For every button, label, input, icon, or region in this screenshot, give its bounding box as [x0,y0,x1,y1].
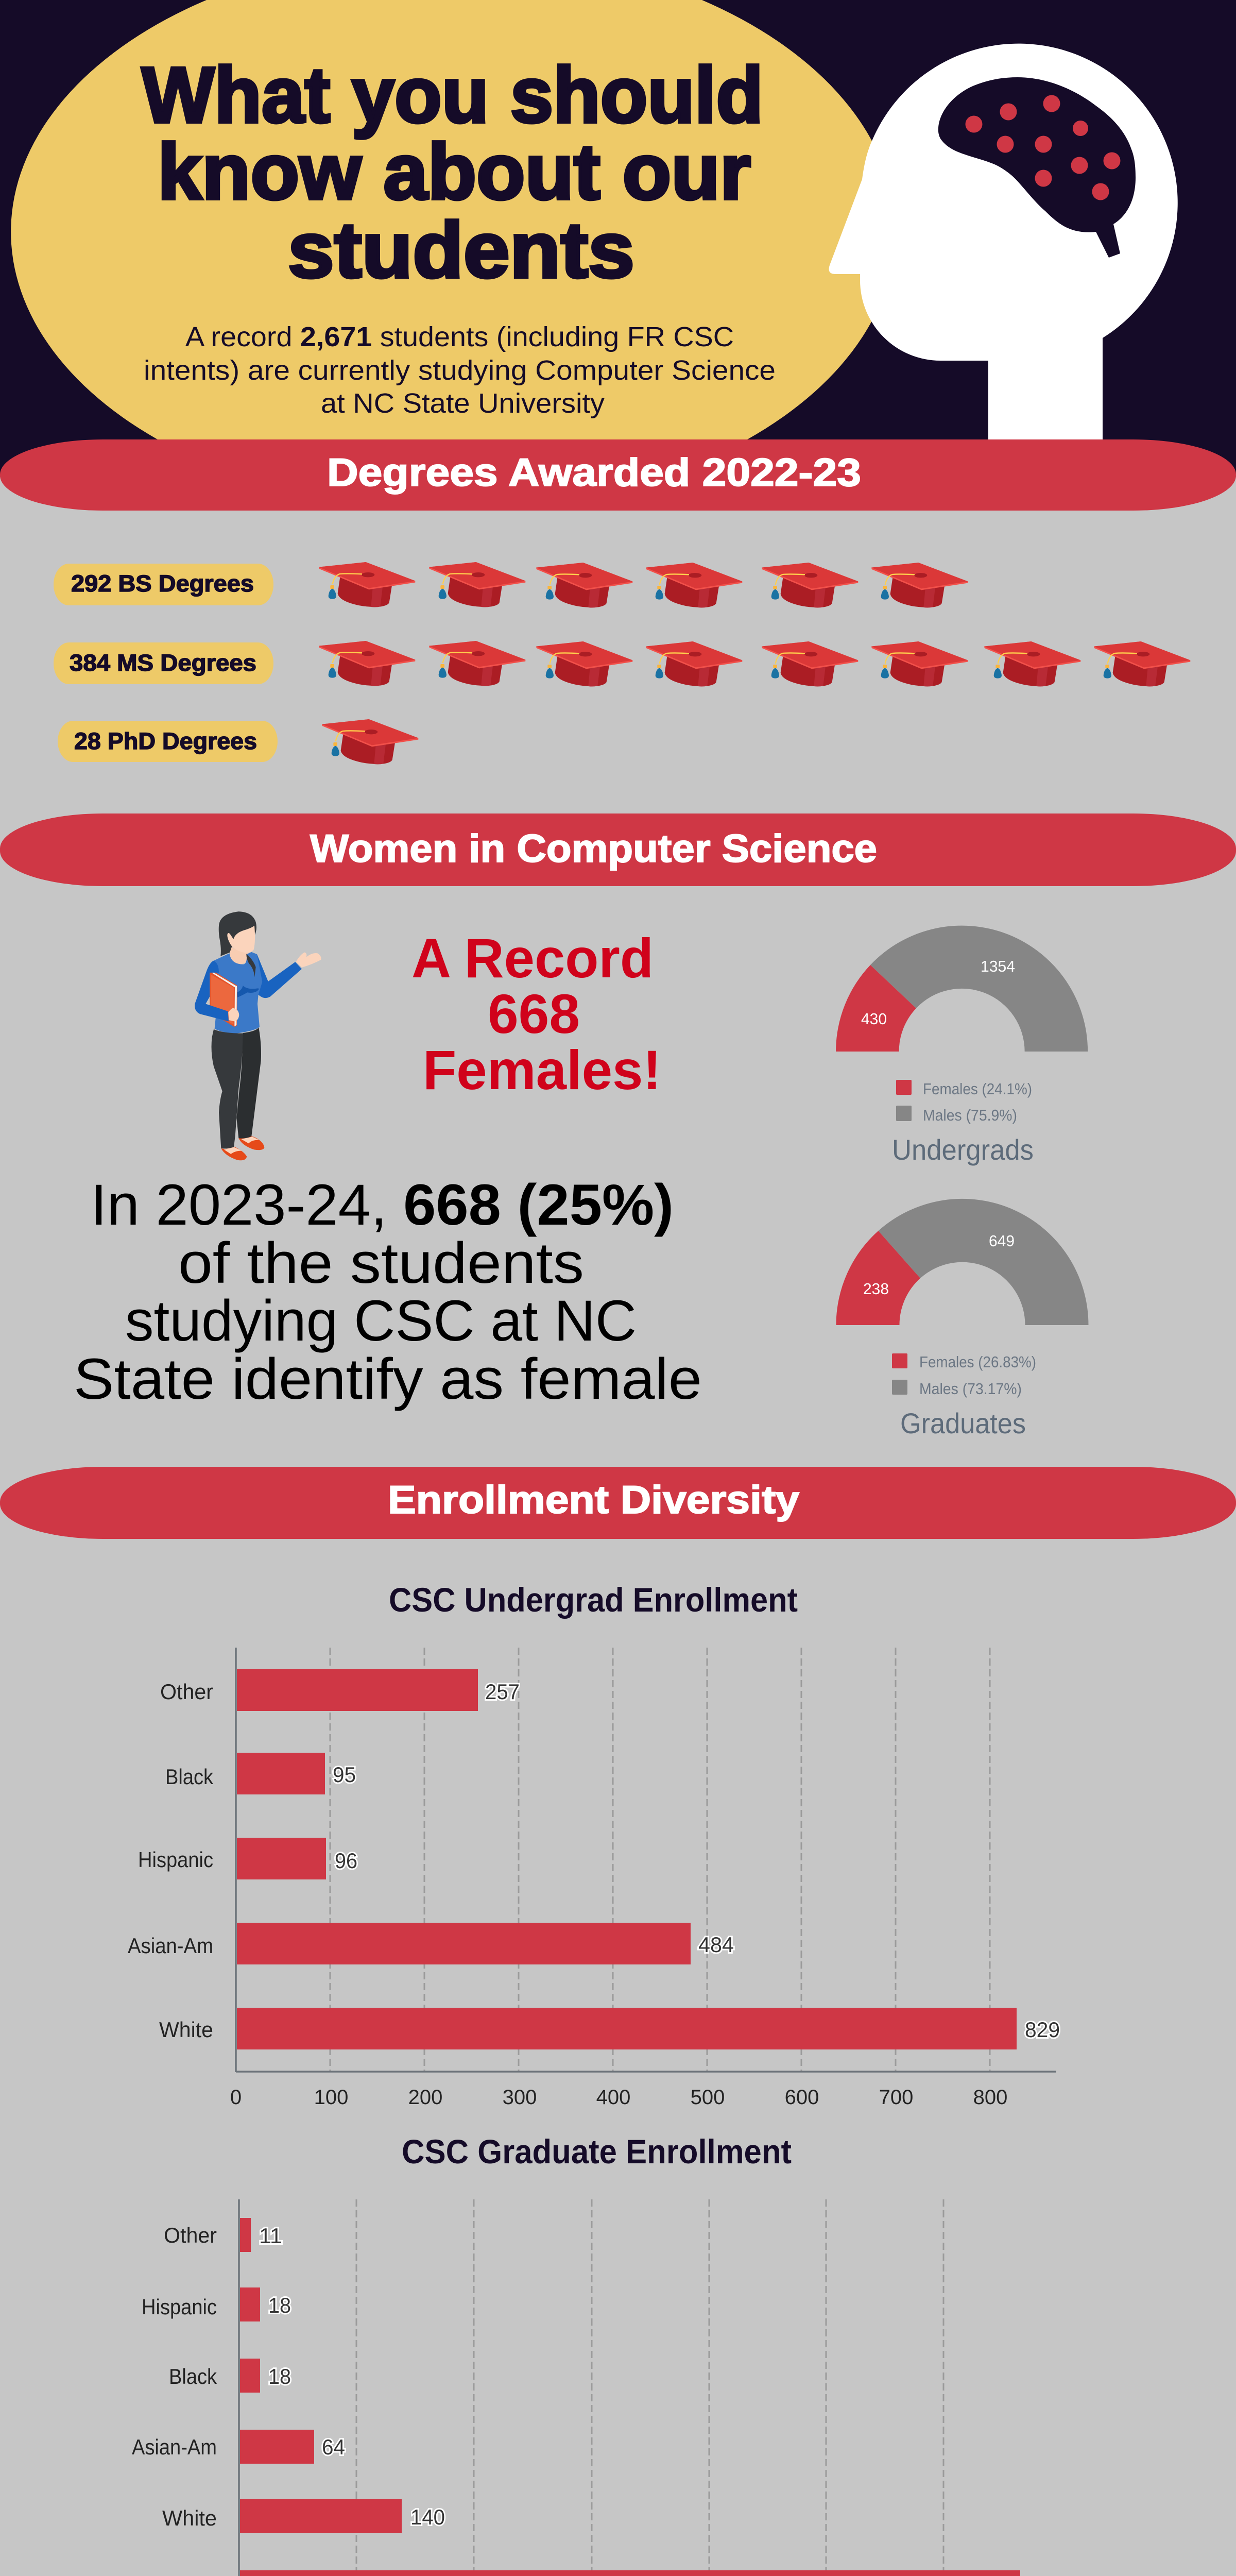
bar: white: 829 [1025,2018,1060,2042]
bar: black [169,2359,291,2393]
title: know about our [158,128,751,216]
row: BS degrees [54,562,968,608]
band: enrollment diversity: Enrollment Diversity [388,1478,799,1522]
chart: graduate enrollment bars: CSC Graduate Enrollment [402,2132,792,2171]
bar: hispanic [142,2287,291,2321]
axis tick labels [230,2086,1007,2109]
bar: black: Black [165,1765,214,1789]
bar: intl [188,2570,1062,2576]
band: enrollment diversity [0,1467,1236,1539]
intro text: A record 2,671 students (including FR CSC [185,321,734,352]
row: PhD degrees [58,719,418,765]
bar: hispanic: 96 [335,1849,357,1873]
chart: undergrads donut: 430 [861,1010,887,1028]
bar: asian-am: 484 [698,1933,734,1957]
row: MS degrees: 384 MS Degrees [70,650,256,676]
chart: graduates donut [836,1199,1089,1439]
title: students [288,206,634,294]
bar: black: 18 [268,2364,291,2388]
axis tick labels: 100 [314,2086,348,2109]
callout: a record 668 females [411,927,661,1101]
text block: women statistic [74,1173,702,1411]
band: degrees awarded [0,439,1236,511]
legend: graduates [892,1353,1036,1398]
callout: a record 668 females: 668 [488,982,580,1045]
row: BS degrees: 292 BS Degrees [71,570,254,597]
legend: undergrads: Males (75.9%) [923,1106,1017,1124]
bar: asian-am: Asian-Am [128,1934,213,1958]
chart: undergrads donut: 1354 [981,957,1015,975]
legend: graduates: Males (73.17%) [919,1380,1022,1398]
legend: undergrads: Females (24.1%) [923,1080,1032,1098]
bar: black: 95 [333,1762,356,1787]
axis tick labels: 0 [230,2086,242,2109]
bar: hispanic [138,1838,357,1879]
bar: asian-am: Asian-Am [132,2435,217,2459]
intro text [144,321,776,419]
intro text: intents) are currently studying Computer Science [144,355,776,386]
bar: hispanic: Hispanic [142,2295,217,2319]
chart: graduates donut: 649 [989,1232,1015,1250]
axis tick labels: 200 [408,2086,442,2109]
panel: degree counts [54,562,1190,765]
bar: other: Other [164,2223,217,2247]
axis tick labels: 500 [691,2086,725,2109]
bar: asian-am: 64 [322,2435,345,2459]
bar: other: 257 [485,1680,520,1704]
callout: a record 668 females: Females! [423,1039,661,1101]
band: women in computer science: Women in Computer Science [310,827,877,871]
bar: white: White [159,2018,213,2042]
chart: undergrad enrollment bars: CSC Undergrad Enrollment [389,1581,798,1619]
icon: head with brain [829,44,1178,439]
header panel [0,0,1236,477]
legend: graduates: Females (26.83%) [919,1353,1036,1371]
band: women in computer science [0,814,1236,886]
text block: women statistic: of the students [178,1231,584,1295]
axis tick labels: 800 [973,2086,1007,2109]
callout: a record 668 females: A Record [411,927,654,989]
axis tick labels: 400 [596,2086,630,2109]
text block: women statistic: State identify as female [74,1347,702,1411]
bar: black: Black [169,2364,217,2388]
bar: asian-am [132,2430,345,2464]
bar: other: 11 [259,2224,282,2248]
bar: white [162,2499,445,2533]
intro text: at NC State University [321,388,605,419]
bar: other: Other [160,1680,213,1704]
text block: women statistic: studying CSC at NC [125,1289,637,1353]
bar: hispanic: Hispanic [138,1848,213,1872]
bar: black [165,1753,356,1794]
bar: white [159,2008,1060,2049]
title [142,51,763,294]
bar: white: White [162,2506,217,2530]
band: degrees awarded: Degrees Awarded 2022-23 [327,451,861,495]
bar: hispanic: 18 [268,2293,291,2317]
row: MS degrees [54,641,1190,687]
text block: women statistic: In 2023-24, 668 (25%) [91,1173,674,1237]
legend: undergrads [896,1080,1032,1124]
icon: woman with book [195,911,321,1160]
bar: white: 140 [410,2505,445,2529]
chart: graduates donut: Graduates [900,1407,1026,1439]
yellow title ellipse [11,0,896,439]
title: What you should [142,51,763,139]
chart: undergrad enrollment bars [128,1581,1060,2109]
bar: asian-am [128,1923,734,1964]
axis tick labels: 600 [785,2086,819,2109]
bar: other [164,2218,282,2252]
bar: other [160,1669,520,1711]
row: PhD degrees: 28 PhD Degrees [74,728,257,754]
chart: undergrads donut: Undergrads [892,1133,1034,1166]
chart: graduates donut: 238 [863,1280,889,1298]
axis tick labels: 300 [503,2086,537,2109]
chart: undergrads donut [836,926,1088,1166]
axis tick labels: 700 [879,2086,913,2109]
chart: graduate enrollment bars [132,2132,1062,2576]
